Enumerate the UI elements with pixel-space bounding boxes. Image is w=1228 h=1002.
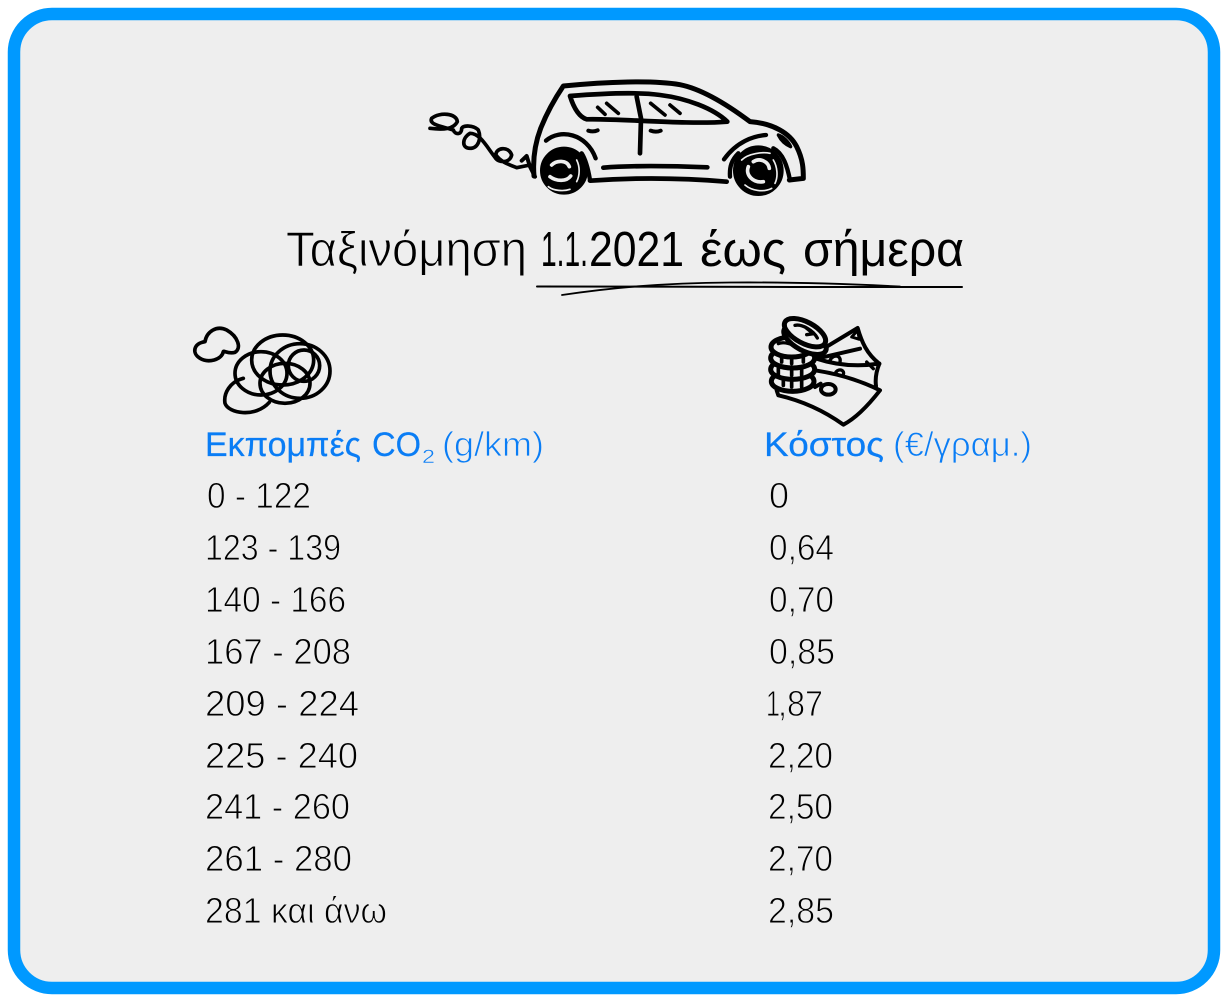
title underline stroke — [537, 282, 962, 295]
emissions ranges column: 0 - 122 — [207, 475, 311, 516]
cost values column: 0,85 — [769, 631, 835, 672]
icon: coins and banknotes — [771, 313, 880, 425]
column heading: cost: Κόστος — [764, 426, 884, 464]
cost values column: 1 — [766, 683, 780, 724]
title: 1.1. — [541, 223, 588, 277]
title: Ταξινόμηση — [286, 223, 527, 277]
title: σήμερα — [803, 223, 964, 277]
cost values column — [766, 475, 835, 931]
emissions ranges column: 209 - 224 — [205, 683, 359, 724]
column heading: CO2 emissions: 2 — [422, 447, 435, 468]
emissions ranges column — [205, 475, 387, 931]
icon: car with exhaust smoke — [430, 82, 803, 195]
column heading: CO2 emissions: Εκπομπές — [205, 426, 361, 464]
emissions ranges column: 167 - 208 — [205, 631, 351, 672]
cost values column: 0 — [769, 475, 789, 516]
icon: CO2 smoke clouds — [195, 328, 330, 413]
column heading: CO2 emissions: CO — [372, 426, 421, 464]
cost values column: 0,70 — [769, 579, 834, 620]
cost values column: 2,85 — [768, 890, 834, 931]
cost values column: 2,50 — [768, 786, 833, 827]
emissions ranges column: 140 - 166 — [205, 579, 346, 620]
column heading: cost — [764, 426, 1032, 464]
emissions ranges column: 225 - 240 — [205, 735, 358, 776]
emissions ranges column: 281 και άνω — [205, 890, 387, 931]
title — [286, 223, 964, 277]
emissions ranges column: 261 - 280 — [205, 838, 352, 879]
cost values column: 2,70 — [768, 838, 833, 879]
emissions ranges column: 241 - 260 — [205, 786, 350, 827]
column heading: CO2 emissions — [205, 426, 544, 468]
column heading: CO2 emissions: (g/km) — [442, 426, 544, 464]
title: έως — [700, 223, 786, 277]
cost values column: 2,20 — [768, 735, 833, 776]
cost values column: 0,64 — [769, 527, 834, 568]
title: 2021 — [589, 223, 684, 277]
column heading: cost: (€/γραμ.) — [893, 426, 1032, 464]
cost values column: ,87 — [778, 683, 823, 724]
emissions ranges column: 123 - 139 — [205, 527, 341, 568]
